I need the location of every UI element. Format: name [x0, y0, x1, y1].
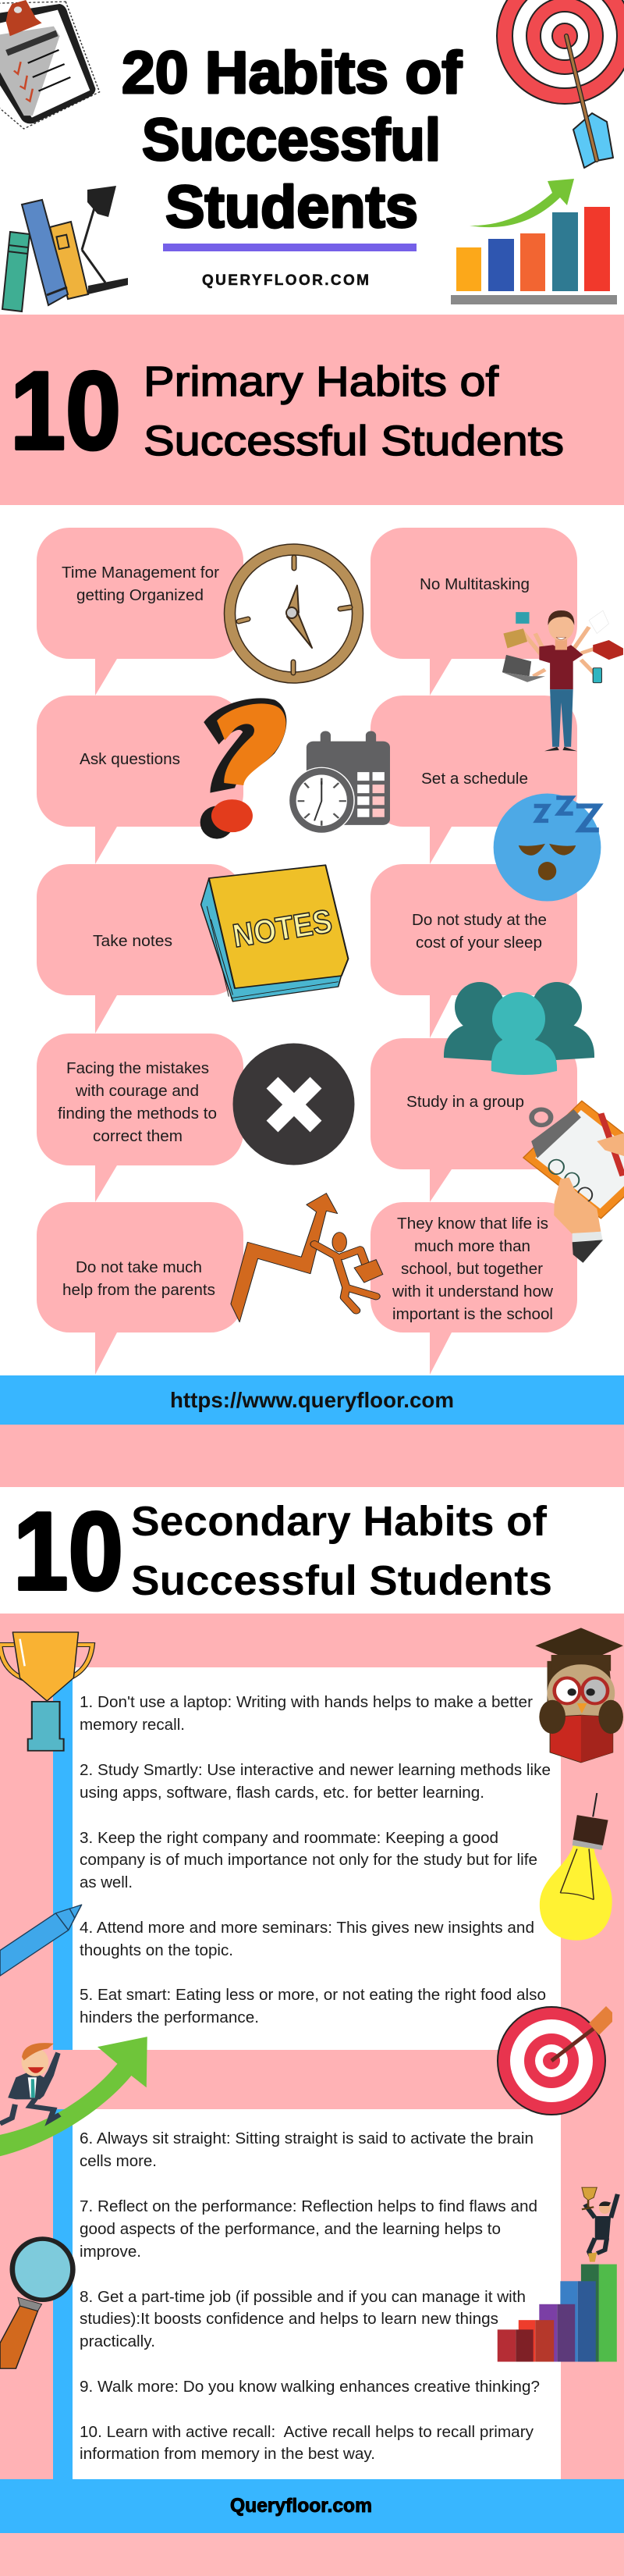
heading: secondary habits	[13, 1489, 552, 1614]
icon: jumping winner with trophy	[582, 2187, 618, 2262]
panel: list part one: memory recall.	[80, 1716, 185, 1734]
panel: list part one: as well.	[80, 1873, 133, 1891]
icon: climbing zigzag arrow with figure	[231, 1194, 383, 1322]
bubble: life and school: important is the school	[392, 1305, 553, 1323]
panel: list part two: practically.	[80, 2332, 155, 2350]
pink spacer band	[0, 1425, 624, 1487]
icon: sleeping face	[494, 794, 601, 902]
icon: crimson target	[498, 2006, 612, 2115]
bubble: parents	[37, 1202, 243, 1375]
bubble: facing mistakes: finding the methods to	[58, 1105, 217, 1123]
panel: list part one: using apps, software, flash cards, etc. for better learning.	[80, 1784, 484, 1802]
panel: list part two: 9. Walk more: Do you know walking enhances creative thinking?	[80, 2378, 540, 2396]
bubble: facing mistakes	[37, 1034, 243, 1202]
panel: list part two: improve.	[80, 2243, 141, 2261]
icon: clipboard with hand	[523, 1101, 624, 1263]
panel: secondary habits background	[0, 1614, 624, 2479]
icon: checklist clipboard	[0, 0, 100, 129]
bubble: life and school: school, but together	[401, 1260, 543, 1278]
icon: man on green arrow	[0, 2037, 147, 2156]
icon: calendar with clock	[289, 731, 390, 833]
bubble: ask questions: Ask questions	[80, 750, 180, 768]
banner: primary habits: Successful Students	[144, 418, 564, 464]
bubble: take notes	[37, 864, 243, 1034]
icon: pencil	[0, 1905, 82, 1976]
bubble: time management: Time Management for	[62, 564, 219, 582]
panel: list part two: information from memory in the best way.	[80, 2445, 375, 2463]
bubble: study in a group: Study in a group	[406, 1093, 524, 1111]
panel: list part two: 7. Reflect on the performance: Reflection helps to find flaws and	[80, 2197, 537, 2215]
panel: list part one: 1. Don't use a laptop: Writing with hands helps to make a better	[80, 1693, 533, 1711]
panel: list part one: company is of much importance not only for the study but for life	[80, 1851, 537, 1869]
icon: mistake cross	[232, 1043, 354, 1165]
banner: primary habits: Primary Habits of	[144, 358, 499, 405]
bubble: facing mistakes: with courage and	[75, 1082, 199, 1100]
footer bar: Queryfloor.com	[230, 2495, 372, 2517]
bubble: parents: help from the parents	[62, 1281, 215, 1299]
bubble: set a schedule	[370, 696, 577, 864]
icon: target with arrow	[497, 0, 624, 168]
bubble: life and school	[370, 1202, 577, 1375]
panel: list part two: 6. Always sit straight: Sitting straight is said to activate the brain	[80, 2129, 534, 2147]
bubble: facing mistakes: Facing the mistakes	[66, 1059, 209, 1077]
panel: list part one: 2. Study Smartly: Use interactive and newer learning methods like	[80, 1761, 551, 1779]
icon: owl with book	[535, 1628, 623, 1763]
icon: notes book	[201, 865, 348, 1002]
panel: list part one	[53, 1667, 561, 2050]
link bar: https://www.queryfloor.com	[170, 1388, 454, 1412]
footer pink band	[0, 2533, 624, 2576]
bubble: time management: getting Organized	[76, 586, 204, 604]
heading: secondary habits: 10	[13, 1489, 123, 1614]
footer bar	[0, 2479, 624, 2533]
bubble: life and school: with it understand how	[392, 1283, 553, 1300]
notes label: NOTES	[230, 902, 335, 954]
bubble: no multitasking	[370, 528, 577, 696]
panel: list part one: thoughts on the topic.	[80, 1941, 233, 1959]
icon: books and lamp	[2, 186, 128, 311]
bubble: sleep: cost of your sleep	[416, 934, 542, 952]
icon: question mark	[200, 698, 286, 839]
icon: wall clock	[225, 544, 363, 683]
bubble: no multitasking: No Multitasking	[420, 575, 530, 593]
divider bar	[163, 244, 417, 251]
icon: light bulb	[540, 1793, 612, 1941]
title	[122, 40, 463, 240]
bubble: facing mistakes: correct them	[93, 1127, 183, 1145]
icon: magnifying glass	[0, 2239, 73, 2368]
bar chart with arrow	[451, 179, 617, 304]
title: Students	[165, 174, 418, 240]
title: 20 Habits of	[122, 40, 463, 106]
icon: rising stair bars	[498, 2265, 617, 2362]
icon: group of people	[444, 982, 594, 1075]
bubble: ask questions	[37, 696, 243, 864]
panel: list part two: good aspects of the performance, and the learning helps to	[80, 2220, 501, 2238]
panel: list part two: 8. Get a part-time job (if possible and if you can manage it with	[80, 2288, 526, 2306]
bubble: life and school: They know that life is	[397, 1215, 548, 1233]
panel: list part two: 10. Learn with active recall: Active recall helps to recall primary	[80, 2423, 534, 2441]
link bar	[0, 1375, 624, 1425]
panel: list part one: hinders the performance.	[80, 2008, 259, 2026]
panel: list part one: 3. Keep the right company and roommate: Keeping a good	[80, 1829, 498, 1847]
heading: secondary habits: Secondary Habits of	[131, 1498, 548, 1545]
icon: multitasking man	[502, 610, 623, 751]
title: Successful	[142, 107, 441, 173]
bubble: time management	[37, 528, 243, 696]
bubble: sleep	[370, 864, 577, 1038]
banner: primary habits	[0, 315, 624, 505]
bubble: take notes: Take notes	[93, 932, 172, 950]
brand label: QUERYFLOOR.COM	[202, 272, 369, 289]
bubble: set a schedule: Set a schedule	[421, 770, 528, 788]
panel: list part two: cells more.	[80, 2152, 157, 2170]
bubble: life and school: much more than	[414, 1237, 530, 1255]
bubble: sleep: Do not study at the	[412, 911, 547, 929]
heading: secondary habits: Successful Students	[131, 1557, 552, 1604]
panel: list part one: 4. Attend more and more seminars: This gives new insights and	[80, 1919, 534, 1937]
bubble: study in a group	[370, 1038, 577, 1202]
panel: list part two: studies):It boosts confidence and helps to learn new things	[80, 2310, 498, 2328]
bubble: parents: Do not take much	[76, 1258, 202, 1276]
panel: list part one: 5. Eat smart: Eating less or more, or not eating the right food also	[80, 1986, 546, 2004]
icon: trophy	[0, 1632, 92, 1751]
panel: list part two	[53, 2109, 561, 2479]
banner: primary habits: 10	[10, 349, 121, 473]
